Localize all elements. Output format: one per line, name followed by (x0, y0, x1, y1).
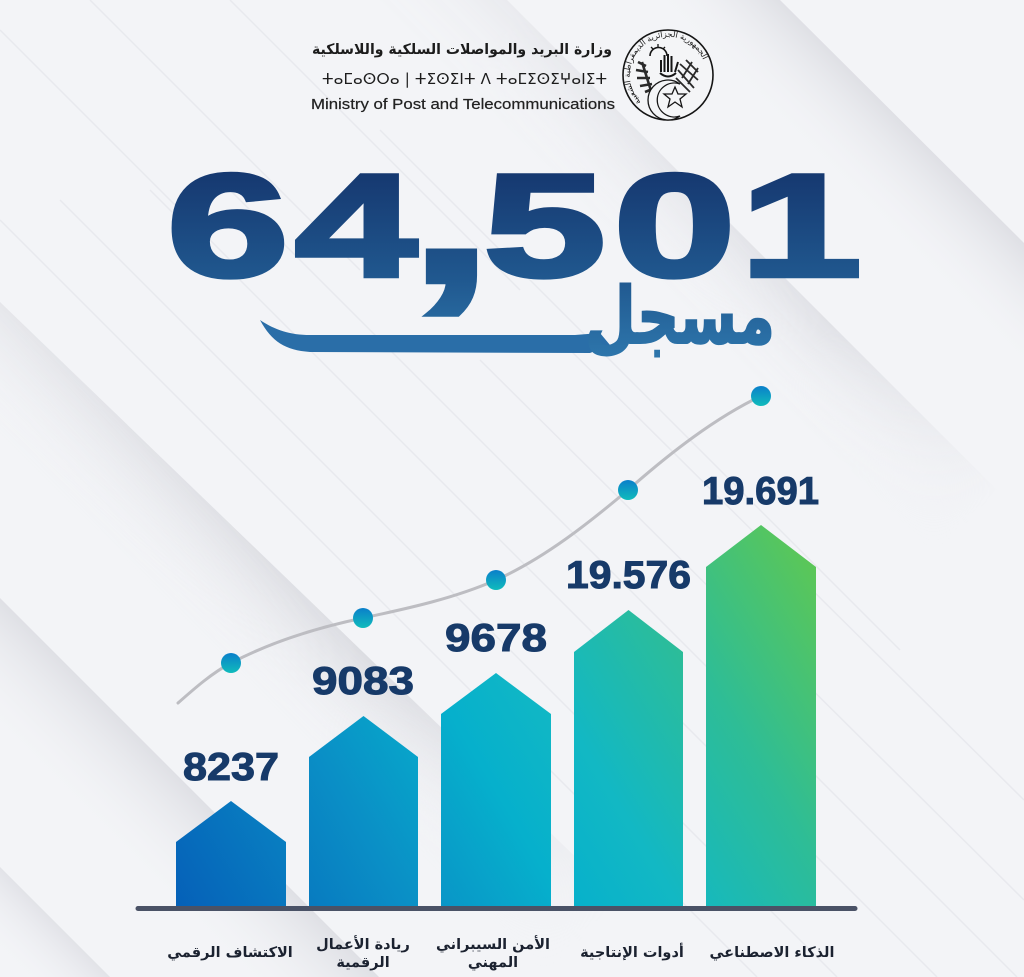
trend line (178, 386, 771, 703)
data point 5 (751, 386, 771, 406)
label: professional cybersecurity: الأمن السيبراني (436, 935, 550, 953)
label: professional cybersecurity: المهني (468, 955, 518, 971)
English ministry name: Ministry of Post and Telecommunications (311, 97, 615, 113)
bar: cybersecurity (441, 673, 551, 907)
label: digital discovery: الاكتشاف الرقمي (167, 945, 293, 961)
label: artificial intelligence: الذكاء الاصطناعي (710, 945, 834, 961)
label: digital entrepreneurship (316, 935, 410, 971)
bar: artificial intelligence (706, 525, 816, 907)
main figure: 64,501: 501 (484, 145, 862, 307)
data point 2 (353, 608, 373, 628)
label: productivity tools: أدوات الإنتاجية (580, 943, 684, 961)
main figure: 64,501 (167, 92, 862, 327)
Arabic ministry name: وزارة البريد والمواصلات السلكية واللاسلكية (312, 42, 612, 58)
Tamazight ministry name: ⵜⴰⵎⴰⵙⵔⴰ | ⵜⵉⵙⵉⵏⵜ ⴷ ⵜⴰⵎⵉⵙⵉⵖⴰⵏⵉⵜ (322, 70, 607, 88)
value: 8237: 8237 (183, 746, 279, 789)
bar: productivity tools (574, 610, 683, 907)
data point 1 (221, 653, 241, 673)
bar: digital entrepreneurship (309, 716, 418, 907)
sun (650, 48, 667, 56)
left branch (636, 62, 655, 94)
value: 9678: 9678 (445, 617, 547, 660)
label: digital entrepreneurship: الرقمية (336, 955, 390, 971)
header: ministry name (311, 42, 615, 113)
label: professional cybersecurity (436, 935, 550, 971)
right wheat (676, 60, 698, 92)
value: 19.691: 19.691 (702, 470, 819, 513)
value: 19.576: 19.576 (566, 554, 691, 597)
value: 9083: 9083 (312, 660, 414, 703)
axis (138, 906, 855, 911)
subtitle: مسجل (260, 272, 775, 362)
bar chart (138, 525, 855, 908)
data point 4 (618, 480, 638, 500)
main figure: 64,501: , (407, 92, 495, 327)
icon: national seal: الجمهورية الجزائرية الديمقراطية الشعبية (624, 31, 708, 104)
hand (660, 54, 678, 76)
data point 3 (486, 570, 506, 590)
crescent (648, 80, 680, 120)
bar: digital discovery (176, 801, 286, 907)
label: digital entrepreneurship: ريادة الأعمال (316, 935, 410, 953)
main figure: 64,501: 64 (167, 145, 417, 307)
kashida swoosh (260, 320, 610, 353)
star (664, 87, 686, 107)
word: مسجل (585, 272, 775, 362)
